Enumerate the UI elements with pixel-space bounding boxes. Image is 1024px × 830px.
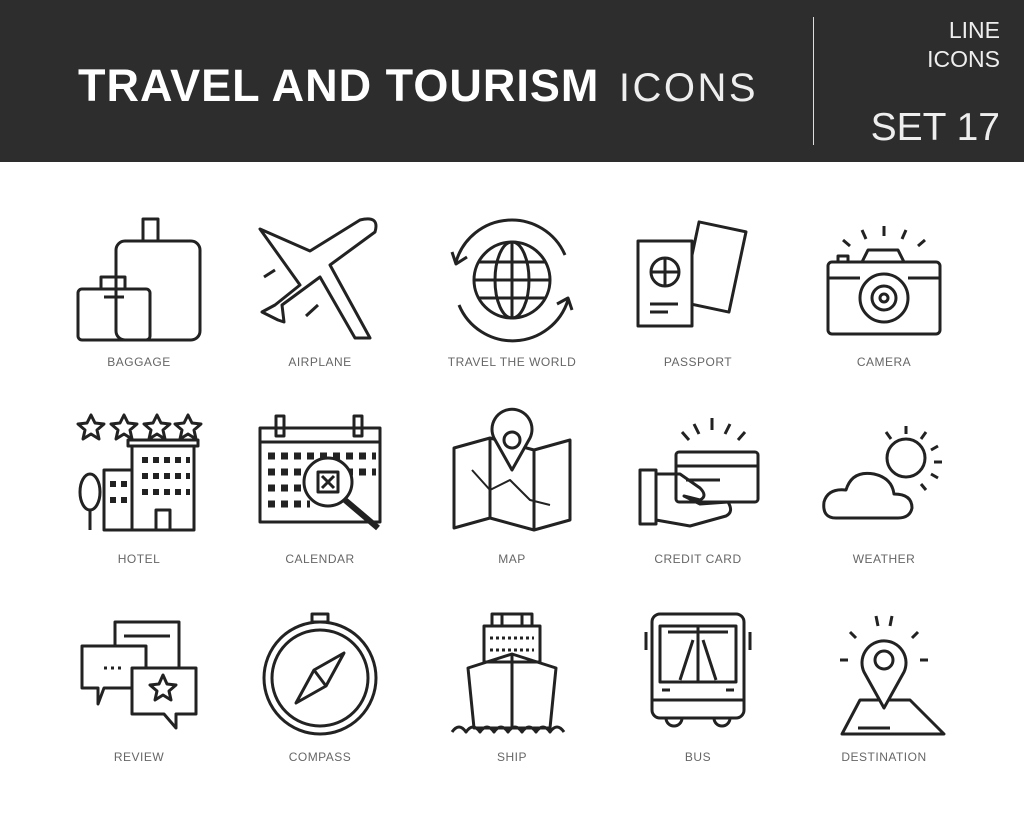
icon: hotel bbox=[78, 415, 201, 530]
icon grid: CREDIT CARD bbox=[654, 552, 742, 566]
icon grid: BUS bbox=[685, 750, 711, 764]
set number: SET 17 bbox=[871, 106, 1000, 149]
icon: compass bbox=[264, 614, 376, 734]
icon grid: BAGGAGE bbox=[107, 355, 171, 369]
icon grid: TRAVEL THE WORLD bbox=[448, 355, 576, 369]
subtitle line icons: ICONS bbox=[927, 46, 1000, 72]
icon: airplane bbox=[260, 219, 376, 338]
icon grid: SHIP bbox=[497, 750, 527, 764]
subtitle line icons: LINE bbox=[949, 17, 1000, 43]
icon: credit card bbox=[640, 418, 758, 526]
icon: travel the world bbox=[452, 220, 572, 341]
icon grid: PASSPORT bbox=[664, 355, 732, 369]
icon: destination bbox=[840, 616, 944, 734]
icon grid: CALENDAR bbox=[285, 552, 355, 566]
title: TRAVEL AND TOURISM ICONS bbox=[78, 60, 758, 111]
icon: calendar bbox=[260, 416, 380, 528]
icon grid: AIRPLANE bbox=[288, 355, 352, 369]
icon: camera bbox=[828, 226, 940, 334]
icon grid: WEATHER bbox=[853, 552, 915, 566]
icon grid: MAP bbox=[498, 552, 526, 566]
icon grid: REVIEW bbox=[114, 750, 164, 764]
icon: map bbox=[454, 409, 570, 530]
icon: ship bbox=[452, 614, 564, 732]
icon grid: DESTINATION bbox=[841, 750, 927, 764]
subtitle line icons bbox=[927, 17, 1000, 72]
icon: weather bbox=[824, 426, 942, 518]
icon grid: COMPASS bbox=[289, 750, 351, 764]
header band bbox=[0, 0, 1024, 162]
icon: baggage bbox=[78, 219, 200, 340]
icon: review bbox=[82, 622, 196, 728]
divider line bbox=[813, 17, 814, 145]
icon grid: CAMERA bbox=[857, 355, 911, 369]
icon: bus bbox=[646, 614, 750, 726]
icon grid: HOTEL bbox=[118, 552, 160, 566]
icon: passport bbox=[638, 222, 746, 326]
